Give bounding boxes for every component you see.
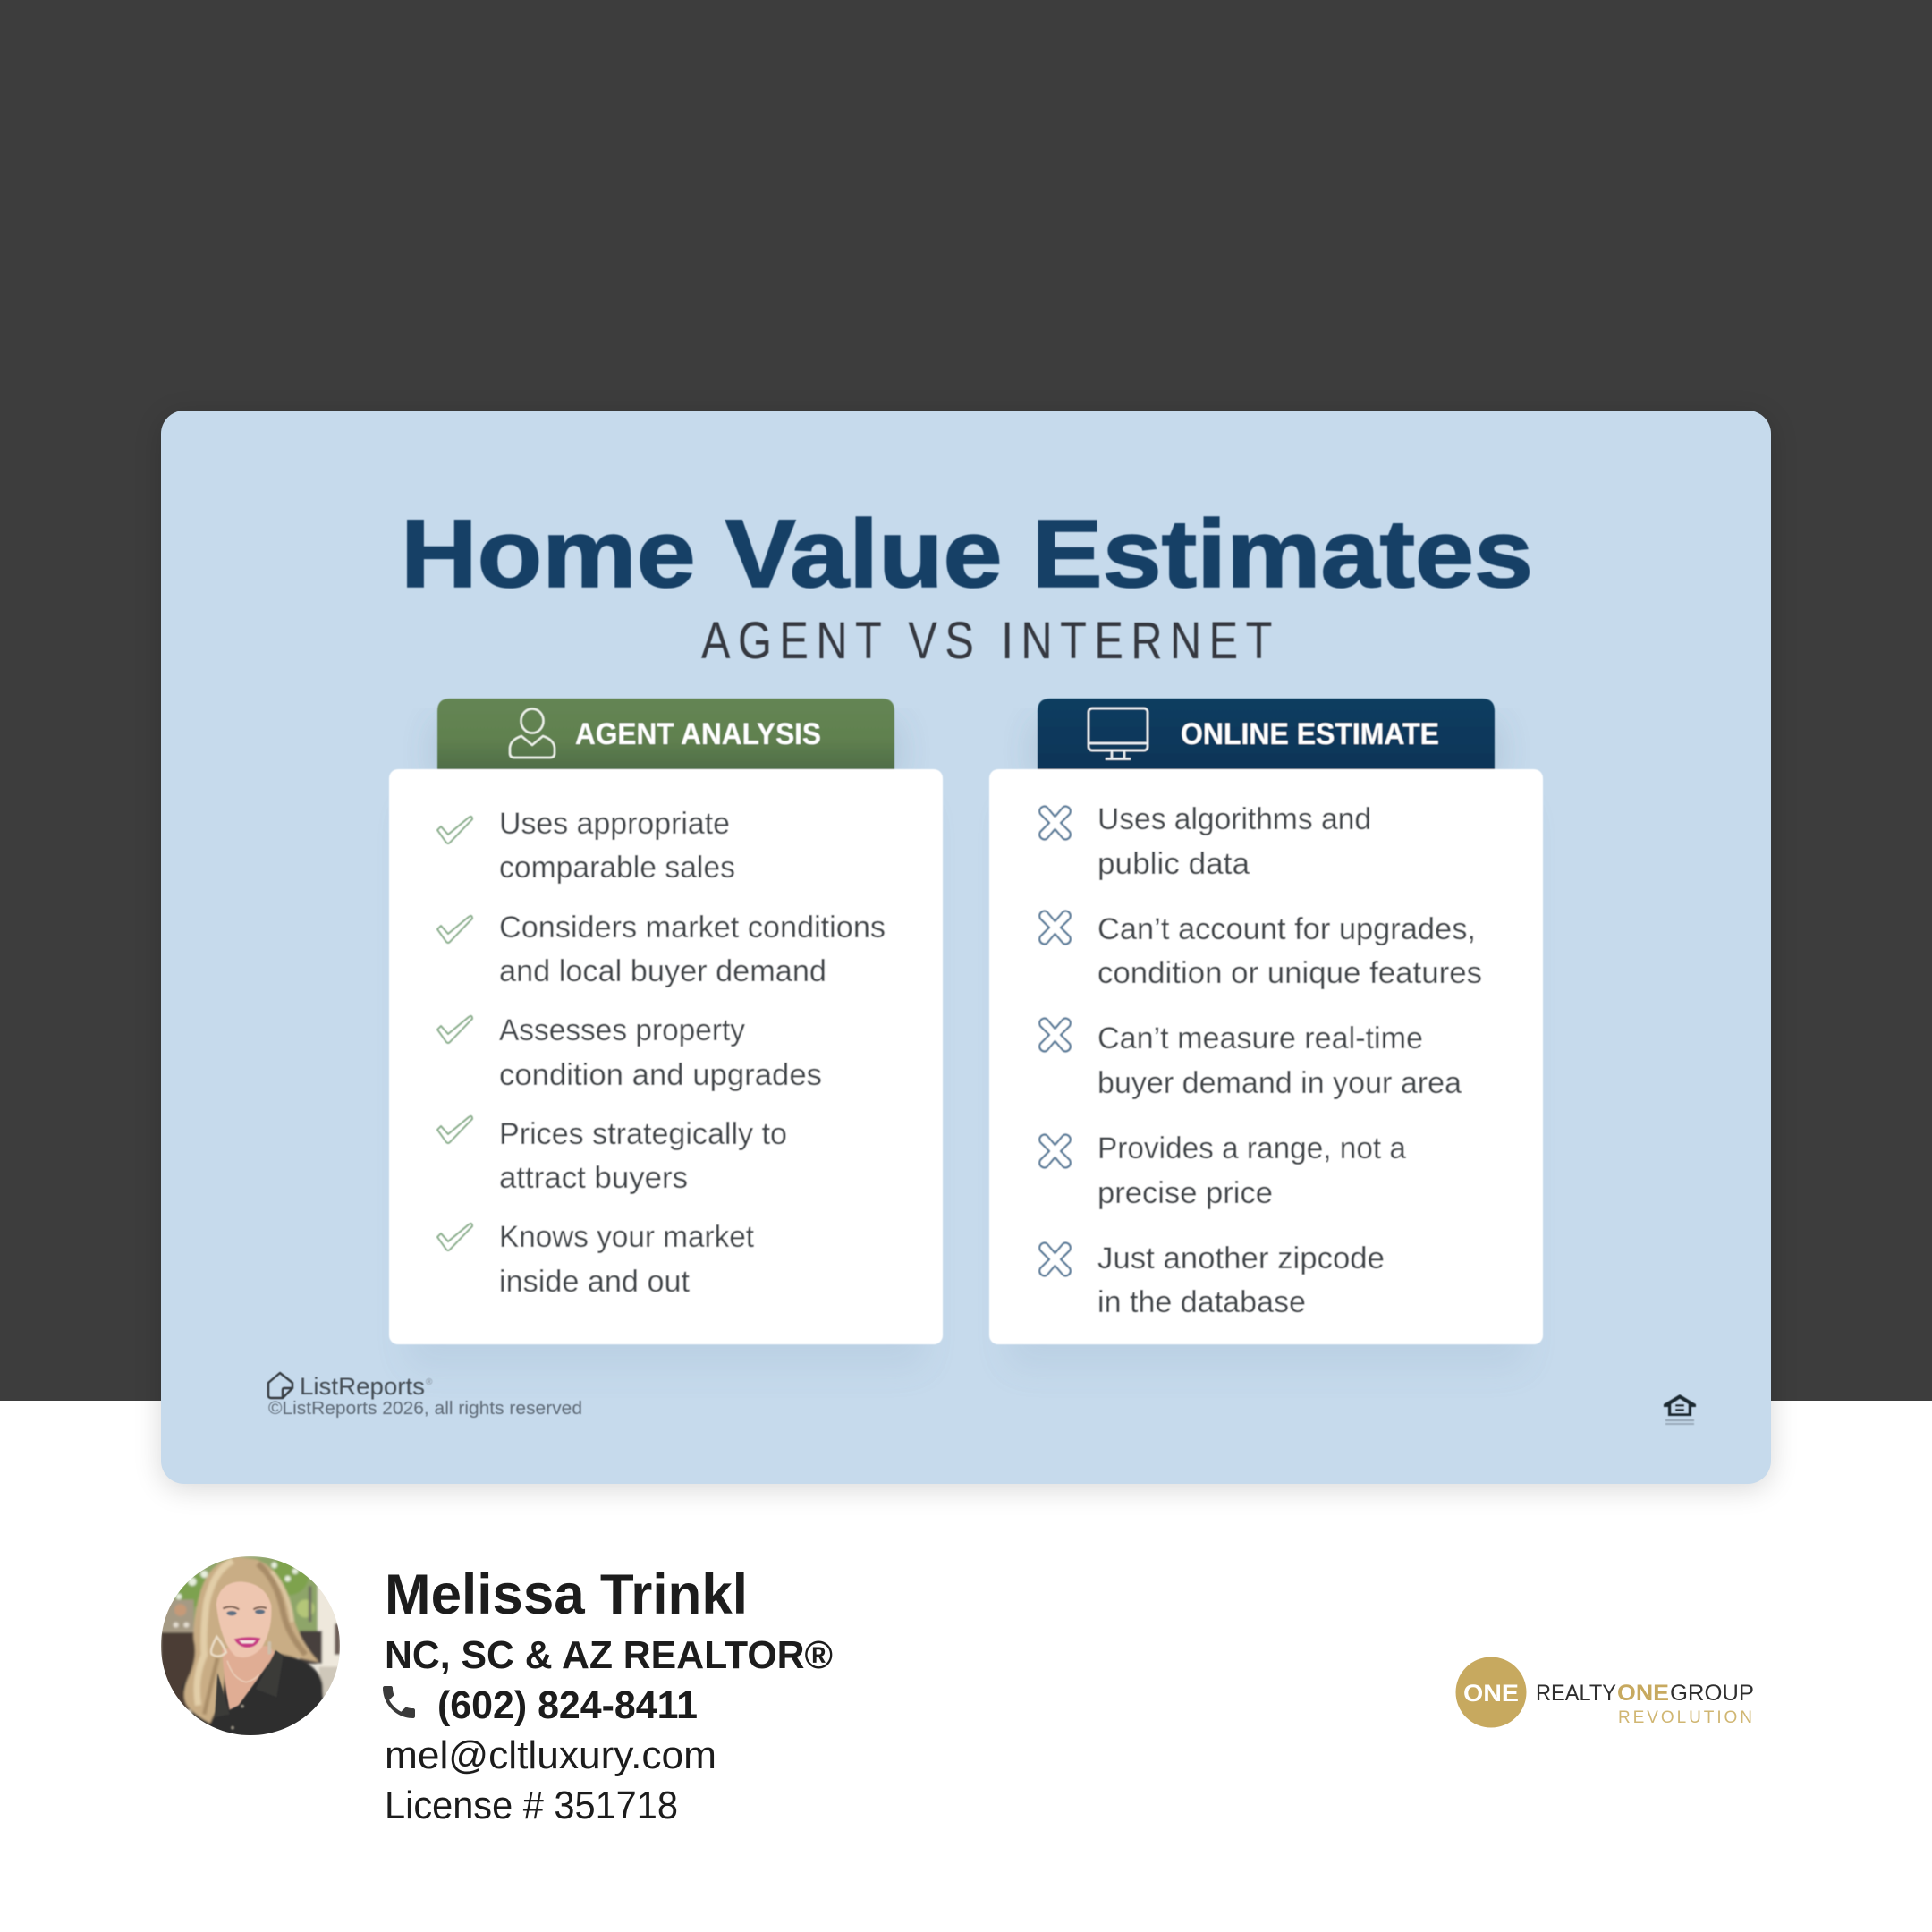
logo wordmark: REALTY xyxy=(1536,1681,1616,1706)
panel: online estimate column xyxy=(989,699,1543,1368)
lips xyxy=(234,1637,260,1648)
item 3: condition and upgrades xyxy=(499,1058,822,1092)
neck and chest xyxy=(222,1646,275,1710)
white card shadow xyxy=(1007,805,1526,1368)
greenery and background xyxy=(161,1556,322,1634)
icon: equal housing xyxy=(1664,1394,1696,1425)
logo wordmark: GROUP xyxy=(1670,1681,1754,1706)
item 2: and local buyer demand xyxy=(499,954,826,988)
item 5: inside and out xyxy=(499,1265,691,1299)
icon: phone xyxy=(383,1686,415,1718)
item 2: Can’t account for upgrades, xyxy=(1097,912,1476,946)
item 3 xyxy=(437,1013,822,1092)
item 5: in the database xyxy=(1097,1285,1306,1319)
item 2: Considers market conditions xyxy=(499,911,886,945)
item 2: condition or unique features xyxy=(1097,956,1482,990)
logo wordmark: ONE xyxy=(1617,1681,1669,1706)
eyes xyxy=(226,1611,237,1615)
subtitle: AGENT VS INTERNET xyxy=(701,613,1272,670)
ListReports footer xyxy=(268,1373,582,1419)
online header label: ONLINE ESTIMATE xyxy=(1181,717,1439,751)
item 4: Prices strategically to xyxy=(499,1117,787,1151)
item 1: Uses appropriate xyxy=(499,807,730,841)
item 2 xyxy=(1039,911,1482,990)
item 3 xyxy=(1039,1018,1462,1100)
icon: agent person xyxy=(510,708,555,758)
icon: ListReports house xyxy=(268,1373,292,1398)
dark background band xyxy=(0,0,1932,1401)
title: Home Value Estimates xyxy=(401,499,1533,607)
item 4 xyxy=(1039,1131,1406,1210)
item 3: buyer demand in your area xyxy=(1097,1066,1462,1100)
ListReports footer: ©ListReports 2026, all rights reserved xyxy=(268,1399,582,1419)
agent header tab xyxy=(437,699,894,769)
item 1: comparable sales xyxy=(499,851,735,885)
item 1: Uses algorithms and xyxy=(1097,802,1371,836)
face xyxy=(216,1581,272,1657)
logo tagline: REVOLUTION xyxy=(1618,1708,1752,1727)
agent role: NC, SC & AZ REALTOR® xyxy=(385,1633,833,1677)
ListReports footer: ® xyxy=(426,1377,433,1387)
item 1 xyxy=(437,807,735,885)
item 4: attract buyers xyxy=(499,1161,688,1195)
logo circle xyxy=(1456,1657,1526,1728)
online header tab xyxy=(1038,699,1495,769)
logo wordmark xyxy=(1536,1681,1754,1706)
logo circle: ONE xyxy=(1463,1680,1519,1707)
item 4: precise price xyxy=(1097,1176,1273,1210)
earrings xyxy=(211,1637,226,1657)
icon: monitor xyxy=(1089,708,1148,758)
white card shadow xyxy=(407,805,926,1368)
online list card xyxy=(989,769,1543,1344)
license: License # 351718 xyxy=(385,1784,678,1827)
item 5 xyxy=(437,1220,755,1299)
item 3: Can’t measure real-time xyxy=(1097,1021,1423,1055)
brows xyxy=(223,1606,267,1609)
item 1 xyxy=(1039,802,1371,881)
item 5: Just another zipcode xyxy=(1097,1241,1385,1275)
item 4: Provides a range, not a xyxy=(1097,1131,1406,1165)
agent header label: AGENT ANALYSIS xyxy=(575,717,821,751)
brokerage logo xyxy=(1456,1657,1754,1728)
item 2 xyxy=(437,911,886,988)
phone number: (602) 824-8411 xyxy=(437,1683,698,1727)
email: mel@cltluxury.com xyxy=(385,1733,716,1777)
card shadow xyxy=(161,416,1771,1489)
shirt xyxy=(182,1652,325,1741)
panel: blue infographic card xyxy=(161,411,1771,1484)
item 5: Knows your market xyxy=(499,1220,755,1254)
item 5 xyxy=(1039,1241,1385,1319)
agent name: Melissa Trinkl xyxy=(385,1563,748,1626)
item 4 xyxy=(437,1116,787,1195)
buttons xyxy=(241,1705,244,1708)
ListReports footer: ListReports xyxy=(300,1373,425,1400)
hair xyxy=(184,1557,319,1724)
agent portrait photo xyxy=(161,1556,340,1741)
item 1: public data xyxy=(1097,847,1250,881)
collar xyxy=(256,1650,284,1697)
necklace xyxy=(227,1661,259,1682)
agent list card xyxy=(389,769,943,1344)
panel: agent analysis column xyxy=(389,699,943,1368)
item 3: Assesses property xyxy=(499,1013,745,1047)
panel: agent contact details xyxy=(383,1563,833,1827)
